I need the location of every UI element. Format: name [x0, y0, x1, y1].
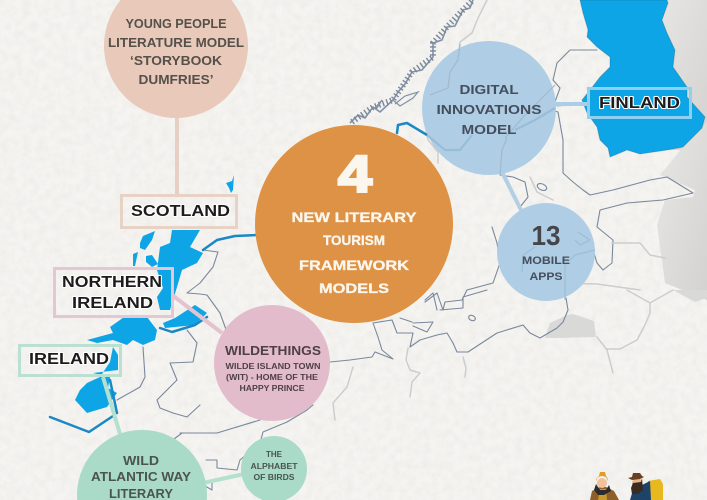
label: Ireland: IRELAND [29, 351, 109, 368]
circle: 13 mobile apps: MOBILE [522, 255, 570, 267]
grey neighbouring land: northern Russia [650, 0, 707, 150]
highlighted territory: Northern Ireland [87, 315, 157, 345]
circle: 13 mobile apps [497, 203, 595, 301]
Swedish interior border [426, 0, 487, 163]
circle: digital innovations model: DIGITAL [460, 82, 519, 97]
grey land: Kaliningrad [545, 314, 596, 338]
connector: young people model to Scotland [175, 116, 179, 196]
circle: digital innovations model: INNOVATIONS [436, 102, 542, 117]
coast of France and the Low Countries [206, 405, 313, 470]
coast of Ireland [117, 347, 145, 400]
coast of Great Britain [157, 250, 260, 433]
circle: new literary tourism framework models: 4 [338, 146, 372, 204]
circle: young people literature model: YOUNG PEOPLE [126, 17, 226, 31]
circle: new literary tourism framework models: MODELS [319, 280, 389, 296]
label: Scotland [122, 196, 236, 228]
connector: Wild Atlantic Way to Alphabet of Birds [203, 474, 244, 483]
illustration: woman hiker [590, 472, 619, 500]
highlighted territory: Scotland and isles [133, 175, 234, 310]
circle: new literary tourism framework models: NEW LITERARY [292, 209, 417, 225]
Norwegian coast [350, 0, 473, 123]
illustration: man hiker with backpack [628, 473, 663, 500]
label: Ireland [20, 346, 120, 376]
circle: Wild Atlantic Way Literary: WILD [123, 454, 159, 468]
circle: Wildethings: HAPPY PRINCE [240, 384, 305, 393]
Gotland outline [530, 177, 553, 200]
label: Northern Ireland: IRELAND [72, 295, 153, 312]
circle: The Alphabet of Birds: ALPHABET [250, 462, 298, 471]
circle: digital innovations model: MODEL [462, 122, 517, 137]
circle: new literary tourism framework models: FRAMEWORK [299, 257, 409, 273]
circle: Wildethings: WILDE ISLAND TOWN [226, 362, 321, 371]
label: Finland: FINLAND [599, 95, 680, 112]
label: Finland [588, 88, 690, 118]
highlighted territory: northern England [163, 305, 207, 328]
grey interior borders of central Europe [333, 243, 673, 420]
circle: young people literature model: DUMFRIES’ [138, 73, 214, 87]
circle: Wildethings: WILDETHINGS [225, 343, 321, 358]
circle: Wildethings [214, 305, 330, 421]
small Baltic island [536, 182, 548, 192]
circle: digital innovations model [422, 41, 556, 175]
grey neighbouring land: western Russia [657, 122, 707, 300]
blue travel routes [50, 104, 585, 432]
label: Scotland: SCOTLAND [131, 203, 230, 220]
circle: The Alphabet of Birds: THE [266, 450, 283, 459]
circle: young people literature model [104, 0, 248, 118]
coast of Cornwall [145, 433, 182, 450]
connector: Northern Ireland to Wildethings [172, 295, 222, 333]
highlighted territory: Finland [580, 0, 705, 157]
connector: Ireland to Wild Atlantic Way [103, 377, 120, 434]
circle: young people literature model: LITERATURE MODEL [108, 36, 244, 50]
connector: Digital Innovations to Finland [550, 102, 590, 106]
label: Northern Ireland [54, 268, 172, 316]
highlighted territory: Republic of Ireland [75, 347, 118, 413]
circle: Wild Atlantic Way Literary [77, 430, 207, 500]
circle: 13 mobile apps: 13 [532, 220, 560, 251]
grey land: eastern border area [673, 290, 707, 302]
Denmark and southern Baltic coast [330, 298, 568, 362]
circle: The Alphabet of Birds: OF BIRDS [254, 473, 295, 482]
connector: Digital Innovations to Mobile Apps [502, 172, 521, 210]
circle: new literary tourism framework models: TOURISM [323, 232, 385, 248]
circle: young people literature model: ‘STORYBOOK [130, 54, 222, 68]
circle: The Alphabet of Birds [241, 436, 307, 500]
label: Northern Ireland: NORTHERN [62, 274, 162, 291]
circle: Wild Atlantic Way Literary: ATLANTIC WAY [91, 470, 192, 484]
circle: Wildethings: (WIT) - HOME OF THE [226, 373, 319, 382]
circle: 13 mobile apps: APPS [530, 271, 562, 283]
Swedish southern coast [425, 175, 528, 310]
circle: new literary tourism framework models [255, 125, 453, 323]
Gulf of Bothnia and Baltic states coast [552, 50, 693, 270]
